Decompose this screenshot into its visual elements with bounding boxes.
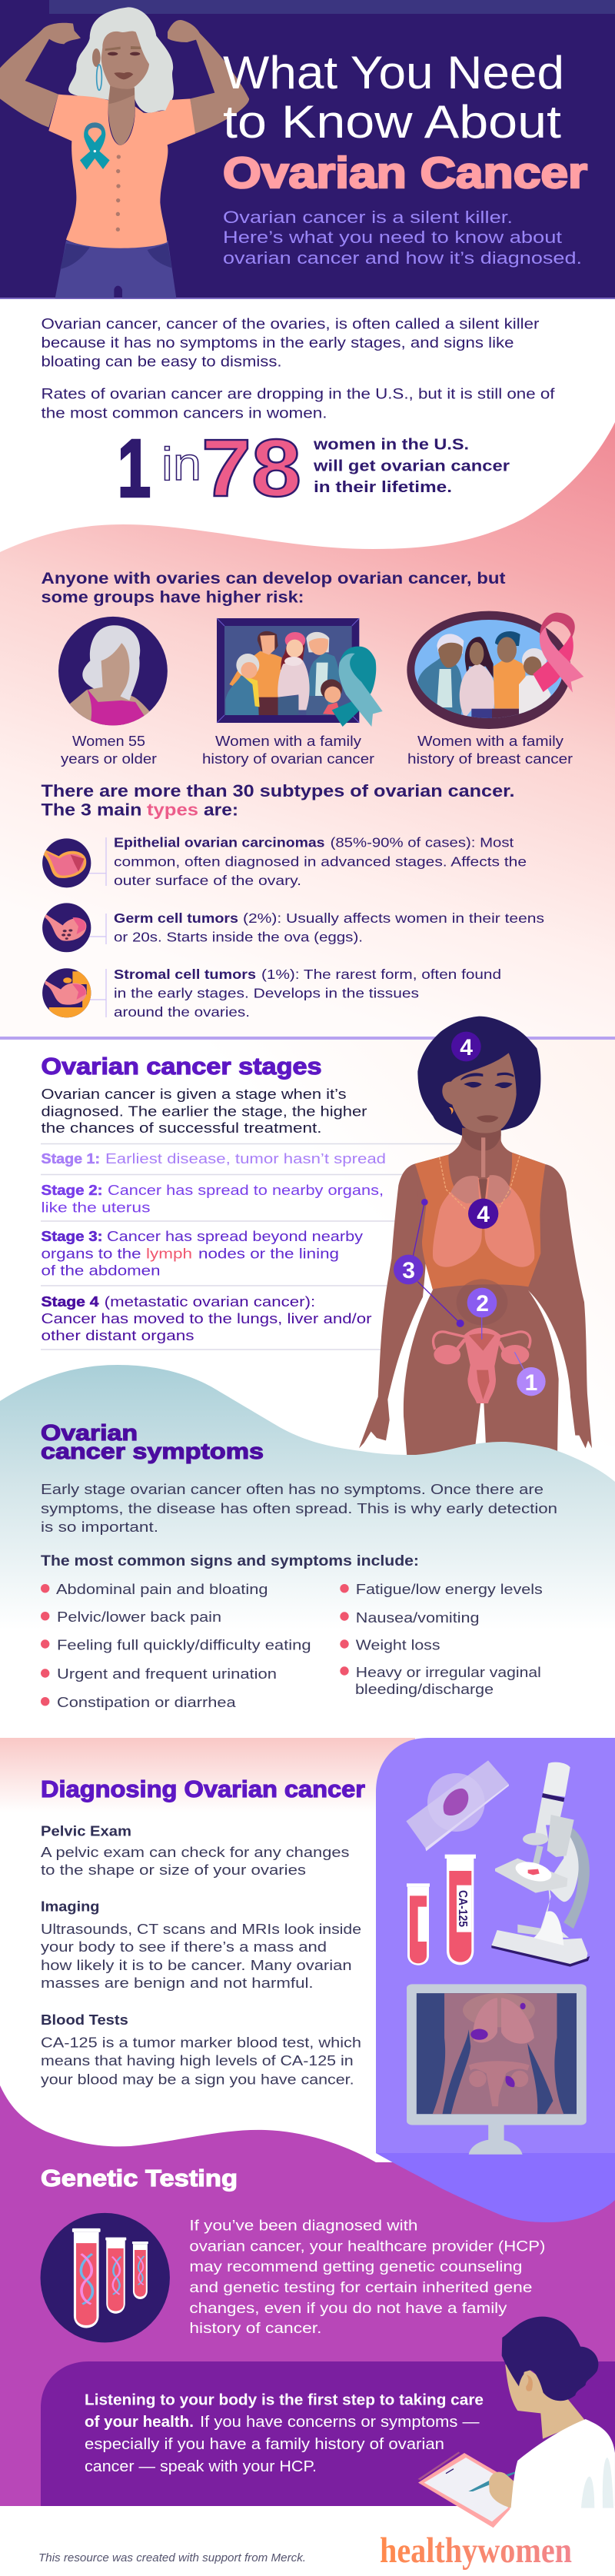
hero subtitle: Here’s what you need to know about — [223, 228, 562, 247]
text: callout message: especially if you have a family history of ovarian — [85, 2436, 444, 2453]
symptoms right column: Weight loss — [356, 1637, 440, 1653]
text: callout message: of your health. — [85, 2414, 194, 2431]
panel: symptoms teal wave background — [0, 1365, 615, 1722]
heading: cancer types: The 3 main — [42, 800, 141, 820]
illustration: body with stage markers: 1 — [525, 1370, 537, 1396]
text: blood tests: means that having high levels of CA-125 in — [41, 2052, 354, 2068]
stage 4: (metastatic ovarian cancer): — [105, 1293, 315, 1310]
hero top band — [49, 0, 615, 14]
cancer type descriptions: Germ cell tumors — [114, 910, 238, 926]
text: callout message: Listening to your body is the first step to taking care — [85, 2391, 484, 2408]
icon: diagnostic monitor with scan — [407, 1984, 587, 2155]
stage 3: nodes or the lining — [198, 1245, 339, 1261]
text: genetic testing body: If you’ve been diagnosed with — [189, 2218, 417, 2235]
cancer type descriptions: (85%-90% of cases): Most — [331, 835, 514, 850]
panel: diagnostic illustrations purple panel — [376, 1738, 615, 2153]
panel: pink risk and types section background — [0, 422, 615, 1038]
logo: healthywomen: healthywomen — [380, 2531, 572, 2571]
panel: callout — [41, 2361, 615, 2506]
symptoms left column: Urgent and frequent urination — [57, 1666, 277, 1682]
cancer type descriptions: or 20s. Starts inside the ova (eggs). — [114, 930, 363, 945]
heading: cancer types: are: — [204, 800, 238, 820]
icon: oval family picture with pink ribbon — [407, 611, 583, 729]
stage 3: Cancer has spread beyond nearby — [107, 1228, 364, 1244]
intro text: because it has no symptoms in the early stages, and signs like — [42, 334, 514, 351]
icon: woman 55 or older portrait — [58, 617, 168, 728]
text: blood tests — [41, 2012, 361, 2088]
cancer type descriptions: common, often diagnosed in advanced stages. Affects the — [114, 854, 527, 870]
statistic: 1 in 78: women in the U.S. — [313, 435, 469, 454]
stage 1: Earliest disease, tumor hasn’t spread — [105, 1150, 386, 1167]
hero subtitle: Ovarian cancer is a silent killer. — [223, 208, 513, 227]
cancer type descriptions — [114, 835, 544, 1020]
illustration: body with stage markers: 4 — [460, 1035, 473, 1060]
risk group captions: years or older — [61, 751, 157, 767]
stage 4: other distant organs — [42, 1327, 194, 1343]
statistic: 1 in 78: 1 — [118, 423, 151, 514]
symptoms introduction: is so important. — [41, 1519, 158, 1535]
stages introduction: the chances of successful treatment. — [42, 1120, 321, 1136]
panel: stages background — [0, 1038, 615, 1446]
connectors for cancer types — [73, 837, 106, 1017]
symptoms right column: Heavy or irregular vaginal — [356, 1664, 541, 1680]
title: Ovarian Cancer — [223, 148, 587, 198]
text: callout message — [85, 2391, 484, 2475]
text: genetic testing body: changes, even if you do not have a family — [189, 2300, 507, 2317]
illustration: body with stage markers: 3 — [402, 1258, 415, 1283]
symptoms right column: bleeding/discharge — [355, 1681, 494, 1697]
risk group captions: Women 55 — [72, 733, 145, 749]
symptoms right column: Fatigue/low energy levels — [356, 1581, 543, 1597]
cancer type descriptions: Stromal cell tumors — [114, 967, 256, 982]
text: pelvic exam: Pelvic Exam — [41, 1822, 131, 1839]
hero subtitle: ovarian cancer and how it’s diagnosed. — [223, 248, 582, 268]
risk group captions: Women with a family — [417, 733, 564, 749]
stage 1: Stage 1: — [42, 1150, 100, 1167]
panel: hero background — [0, 0, 615, 298]
heading: cancer types: types — [147, 800, 198, 820]
lower purple wave — [376, 2153, 615, 2222]
illustration: body with stage markers: 4 — [477, 1202, 490, 1227]
text: imaging: your body to see if there’s a mass and — [41, 1939, 327, 1955]
symptoms left column: Pelvic/lower back pain — [57, 1609, 221, 1625]
icon: epithelial carcinoma ovary — [42, 838, 91, 887]
stage 3: lymph — [146, 1245, 192, 1261]
text: genetic testing body: history of cancer. — [189, 2320, 321, 2337]
title: to Know About — [223, 96, 561, 148]
symptoms left column: Abdominal pain and bloating — [56, 1581, 268, 1597]
text: imaging — [41, 1899, 361, 1991]
statistic: 1 in 78: will get ovarian cancer — [313, 457, 510, 474]
text: imaging: Imaging — [41, 1899, 100, 1915]
heading: diagnosing: Diagnosing Ovarian cancer — [41, 1776, 365, 1802]
heading: symptoms: Ovarian — [41, 1421, 138, 1446]
stage 2: Cancer has spread to nearby organs, — [108, 1182, 384, 1198]
illustration: body with stage markers — [359, 1017, 592, 1456]
stage list rules — [41, 1144, 469, 1350]
intro text: Rates of ovarian cancer are dropping in the U.S., but it is still one of — [42, 386, 555, 403]
cancer type descriptions: (1%): The rarest form, often found — [261, 967, 501, 982]
stage 2: Stage 2: — [42, 1182, 103, 1198]
heading: cancer types: There are more than 30 subtypes of ovarian cancer. — [42, 781, 515, 800]
statistic: 1 in 78: in their lifetime. — [314, 478, 452, 496]
stages introduction: Ovarian cancer is given a stage when it’s — [42, 1086, 346, 1102]
stage 4: Stage 4 — [42, 1293, 99, 1310]
stage 4 — [42, 1293, 372, 1343]
text: genetic testing body — [189, 2218, 545, 2337]
intro text — [42, 315, 555, 421]
stage 3 — [42, 1228, 364, 1279]
risk group captions: history of breast cancer — [407, 751, 573, 767]
hero bottom rule — [0, 298, 615, 299]
icon: germ cell tumor ovary — [42, 903, 91, 952]
cancer type descriptions: outer surface of the ovary. — [114, 873, 301, 888]
stage 3: organs to the — [42, 1245, 141, 1261]
stages introduction: diagnosed. The earlier the stage, the higher — [42, 1103, 367, 1119]
illustration: woman writing on clipboard — [417, 2317, 615, 2528]
text: imaging: masses are benign and not harmful. — [41, 1975, 314, 1991]
heading: genetic testing: Genetic Testing — [41, 2165, 238, 2192]
stage 2: like the uterus — [42, 1199, 151, 1215]
text: pelvic exam: to the shape or size of your ovaries — [41, 1862, 306, 1878]
symptoms left column — [56, 1581, 311, 1710]
text: pelvic exam — [41, 1822, 349, 1878]
stage 3: of the abdomen — [42, 1263, 160, 1279]
illustration: strong woman with teal ribbon — [0, 7, 249, 298]
symptoms introduction: Early stage ovarian cancer often has no symptoms. Once there are — [41, 1481, 544, 1497]
text: callout message: cancer — speak with your HCP. — [85, 2458, 317, 2475]
heading: higher risk groups: some groups have higher risk: — [42, 589, 304, 606]
symptoms right column — [355, 1581, 543, 1697]
text: imaging: how likely it is to be cancer. Many ovarian — [41, 1957, 352, 1973]
icon: microscope — [491, 1762, 590, 1967]
intro text: bloating can be easy to dismiss. — [42, 354, 281, 371]
stage 1 — [42, 1150, 386, 1167]
icon: microscope slide — [406, 1760, 509, 1851]
panel: genetic testing magenta background — [0, 2085, 615, 2506]
title: What You Need — [223, 47, 564, 98]
intro text: Ovarian cancer, cancer of the ovaries, is often called a silent killer — [42, 315, 540, 332]
stage 2 — [42, 1182, 384, 1215]
text: blood tests: Blood Tests — [41, 2012, 128, 2028]
icon: small blood tube — [407, 1883, 430, 1965]
symptoms right column: Nausea/vomiting — [356, 1609, 480, 1626]
icon: CA-125 blood tube: CA-125 — [456, 1890, 469, 1927]
symptoms left column: Feeling full quickly/difficulty eating — [57, 1637, 311, 1653]
text: pelvic exam: A pelvic exam can check for any changes — [41, 1844, 349, 1860]
text: blood tests: CA-125 is a tumor marker blood test, which — [41, 2035, 361, 2050]
title — [223, 47, 587, 198]
text: blood tests: your blood may be a sign you have cancer. — [41, 2072, 354, 2088]
heading: higher risk groups: Anyone with ovaries can develop ovarian cancer, but — [42, 570, 506, 587]
cancer type descriptions: (2%): Usually affects women in their teens — [243, 910, 544, 926]
heading: cancer types — [42, 781, 515, 820]
icon: framed family picture with teal ribbon — [217, 618, 383, 727]
symptoms introduction — [41, 1481, 557, 1535]
text: callout message: If you have concerns or symptoms — — [200, 2414, 480, 2431]
statistic: 1 in 78 — [118, 423, 510, 514]
heading: symptoms — [41, 1421, 264, 1464]
intro text: the most common cancers in women. — [42, 404, 327, 421]
section divider — [0, 1037, 615, 1040]
risk group captions: history of ovarian cancer — [202, 751, 374, 767]
stage 4: Cancer has moved to the lungs, liver and/or — [42, 1310, 372, 1326]
hero subtitle — [223, 208, 582, 268]
heading: symptoms: cancer symptoms — [41, 1439, 264, 1464]
statistic: 1 in 78: 78 — [201, 423, 301, 514]
symptoms bullet markers — [41, 1584, 349, 1706]
statistic: 1 in 78: in — [161, 438, 201, 490]
text: genetic testing body: may recommend getting genetic counseling — [189, 2258, 522, 2275]
cancer type descriptions: Epithelial ovarian carcinomas — [114, 835, 325, 850]
symptoms list heading: The most common signs and symptoms include: — [41, 1553, 419, 1569]
icon: stromal cell tumor ovary — [42, 968, 92, 1020]
stages introduction — [42, 1086, 367, 1136]
cancer type descriptions: around the ovaries. — [114, 1004, 250, 1020]
risk group captions: Women with a family — [215, 733, 362, 749]
credit line: This resource was created with support from Merck. — [38, 2551, 306, 2564]
heading: ovarian cancer stages: Ovarian cancer stages — [42, 1053, 321, 1080]
risk group captions — [61, 733, 573, 767]
icon: genetic test tubes — [41, 2213, 170, 2342]
stage 3: Stage 3: — [42, 1228, 103, 1244]
illustration: body with stage markers: 2 — [476, 1291, 489, 1316]
panel: diagnosing pink header band — [0, 1738, 415, 1812]
cancer type descriptions: in the early stages. Develops in the tissues — [114, 986, 419, 1001]
text: imaging: Ultrasounds, CT scans and MRIs look inside — [41, 1921, 361, 1937]
heading: higher risk groups — [42, 570, 506, 606]
symptoms introduction: symptoms, the disease has often spread. This is why early detection — [41, 1500, 557, 1516]
symptoms left column: Constipation or diarrhea — [57, 1694, 236, 1710]
icon: CA-125 blood tube — [445, 1855, 476, 1965]
text: genetic testing body: ovarian cancer, your healthcare provider (HCP) — [189, 2238, 545, 2255]
text: genetic testing body: and genetic testing for certain inherited gene — [189, 2279, 532, 2296]
